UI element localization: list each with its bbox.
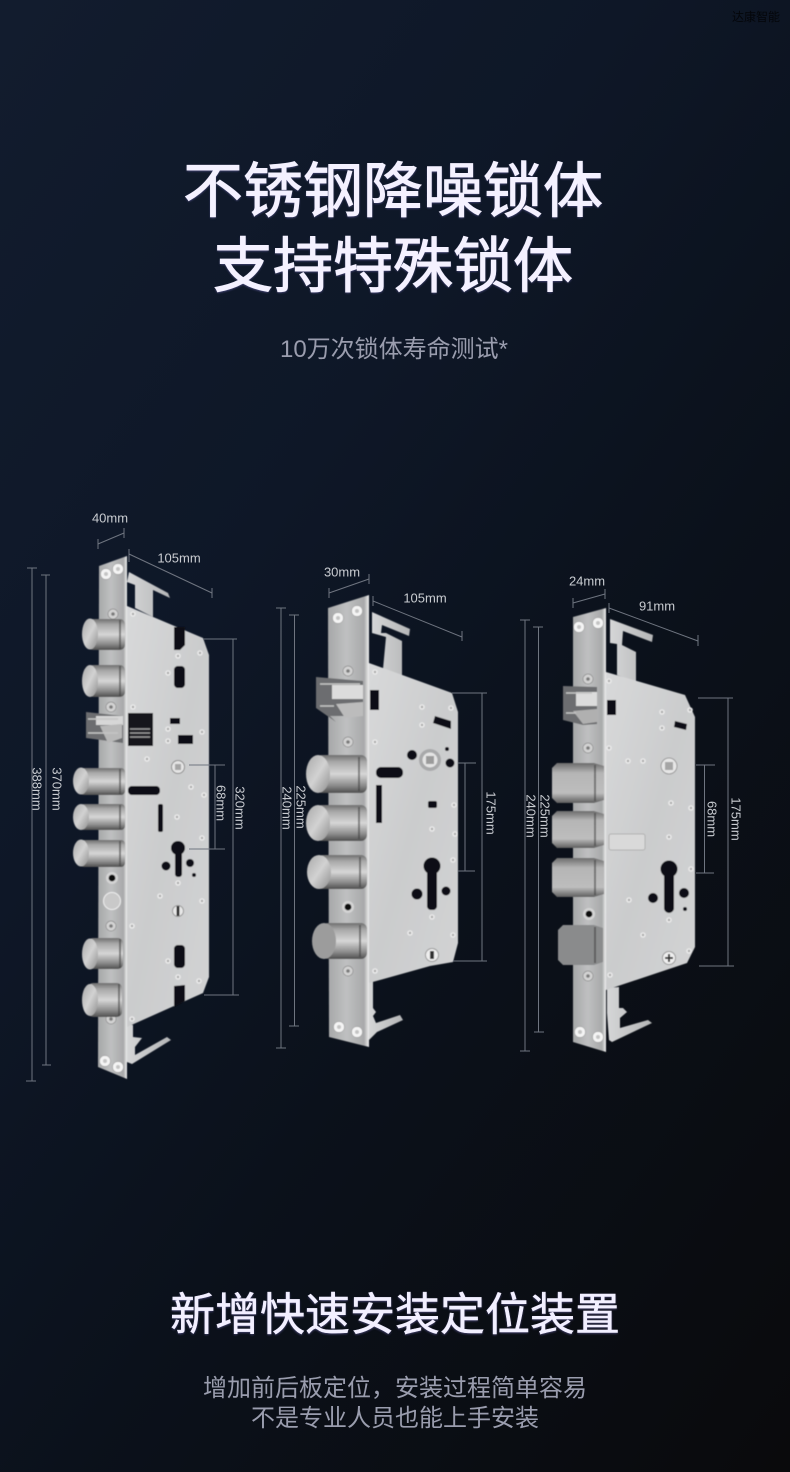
bottom hook — [369, 981, 403, 1040]
title: 不锈钢降噪锁体 — [183, 158, 603, 225]
dimensions: lock 2: 105mm — [403, 590, 447, 606]
cut-outs — [370, 690, 454, 910]
lock 1 — [73, 556, 209, 1079]
bolts — [73, 618, 125, 1017]
dimensions: lock 3: 225mm — [538, 794, 552, 838]
dimensions: lock 2: 175mm — [484, 791, 498, 835]
latch — [86, 712, 123, 743]
dimensions: lock 2: 225mm — [294, 785, 308, 829]
latch — [316, 677, 363, 722]
spindle — [419, 749, 441, 771]
faceplate — [573, 608, 606, 1052]
faceplate — [328, 595, 369, 1047]
dimensions: lock 3: 240mm — [524, 794, 538, 838]
heading: positioning device: 新增快速安装定位装置 — [170, 1289, 620, 1340]
screw — [662, 952, 676, 964]
dimensions: lock 3: 91mm — [639, 598, 675, 614]
rivets — [606, 678, 694, 978]
dimensions: lock 3: 68mm — [704, 801, 720, 837]
title: 支持特殊锁体 — [213, 233, 573, 300]
slot outline — [609, 834, 645, 850]
dimensions: lock 1: 370mm — [50, 767, 64, 811]
spindle — [661, 758, 677, 774]
description — [203, 1375, 587, 1432]
case — [127, 606, 209, 1027]
subtitle: 10万次锁体寿命测试* — [280, 336, 508, 363]
watermark: 达康智能 — [732, 10, 780, 24]
dimensions: lock 3: 24mm — [569, 574, 605, 588]
title — [183, 158, 603, 300]
dimensions: lock 2 — [276, 564, 498, 1048]
dimensions: lock 3 — [520, 574, 744, 1051]
cut-outs — [128, 627, 196, 1007]
rivets — [372, 669, 458, 974]
case — [369, 663, 458, 983]
dimensions: lock 1 — [26, 510, 248, 1081]
bottom hook — [127, 1025, 171, 1064]
top hook — [610, 619, 653, 682]
dimensions: lock 2: 30mm — [324, 564, 360, 580]
rivets — [129, 611, 207, 1022]
dimensions: lock 1: 40mm — [92, 510, 128, 526]
top hook — [372, 612, 410, 677]
faceplate — [98, 556, 127, 1079]
faceplate fixings — [574, 618, 604, 1042]
top hook — [127, 572, 170, 617]
dimensions: lock 1: 68mm — [214, 785, 228, 821]
latch window — [128, 713, 153, 746]
faceplate fixings — [100, 564, 124, 1072]
lock 2 — [306, 595, 458, 1047]
bolts — [306, 755, 367, 959]
screw — [172, 906, 184, 916]
screw — [426, 948, 438, 962]
dimensions: lock 3: 175mm — [728, 797, 744, 841]
description: 增加前后板定位，安装过程简单容易 — [203, 1375, 587, 1402]
spindle — [172, 760, 184, 774]
dimensions: lock 1: 388mm — [30, 767, 44, 811]
bottom hook — [607, 987, 652, 1042]
faceplate fixings — [332, 606, 362, 1038]
dimensions: lock 2: 240mm — [280, 786, 294, 830]
square bolts — [552, 763, 604, 965]
description: 不是专业人员也能上手安装 — [251, 1405, 539, 1432]
latch — [563, 686, 597, 725]
dimensions: lock 1: 320mm — [232, 786, 248, 830]
dimensions: lock 1: 105mm — [157, 550, 201, 566]
cut-outs — [607, 700, 689, 913]
case — [606, 672, 695, 990]
lock 3 — [552, 608, 695, 1052]
